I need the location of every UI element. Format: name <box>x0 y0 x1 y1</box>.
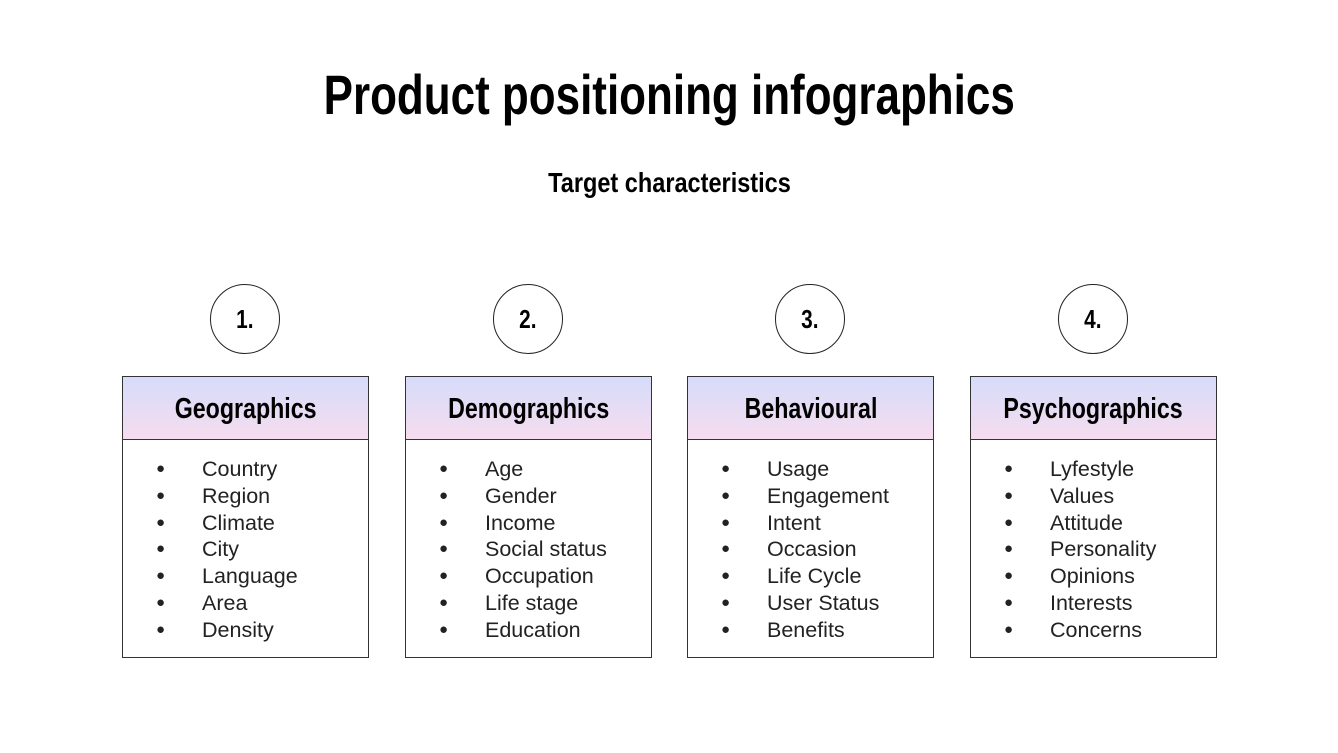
subtitle: Target characteristics <box>548 167 790 198</box>
panel: demographics: Gender <box>485 484 557 508</box>
circle 3: 3. <box>801 304 819 334</box>
panel: geographics: Geographics <box>175 393 316 425</box>
panel: demographics: Social status <box>485 537 607 561</box>
panel: demographics: Age <box>485 457 523 481</box>
panel: geographics: City <box>202 537 239 561</box>
panel: geographics: Density <box>202 618 274 642</box>
panel: behavioural: Intent <box>767 511 821 535</box>
panel: psychographics: Lyfestyle <box>1050 457 1134 481</box>
panel: demographics: Life stage <box>485 591 578 615</box>
panel: geographics: Climate <box>202 511 275 535</box>
panel: geographics: Country <box>202 457 277 481</box>
circle 3 <box>775 284 845 354</box>
circle 1 <box>210 284 280 354</box>
panel: behavioural: Behavioural <box>744 393 877 425</box>
panel: psychographics: Psychographics <box>1004 393 1183 425</box>
panel: behavioural: User Status <box>767 591 879 615</box>
panel: demographics: Demographics <box>448 393 609 425</box>
panel: behavioural: Benefits <box>767 618 845 642</box>
panel: geographics: Language <box>202 564 298 588</box>
circle 2: 2. <box>519 304 537 334</box>
panel: behavioural <box>687 376 934 658</box>
panel: geographics: Area <box>202 591 247 615</box>
panel: psychographics <box>970 376 1217 658</box>
panel: geographics: Region <box>202 484 270 508</box>
panel: psychographics: Attitude <box>1050 511 1123 535</box>
panel: psychographics: Personality <box>1050 537 1156 561</box>
panel: geographics <box>122 376 369 658</box>
circle 4 <box>1058 284 1128 354</box>
panel: behavioural: Engagement <box>767 484 889 508</box>
panel: psychographics: Values <box>1050 484 1114 508</box>
circle 2 <box>493 284 563 354</box>
circle 4: 4. <box>1084 304 1102 334</box>
panel: behavioural: Occasion <box>767 537 857 561</box>
panel: psychographics: Opinions <box>1050 564 1135 588</box>
panel: demographics: Income <box>485 511 556 535</box>
panel: behavioural: Usage <box>767 457 829 481</box>
panel: demographics: Education <box>485 618 581 642</box>
panel: demographics: Occupation <box>485 564 594 588</box>
panel: psychographics: Concerns <box>1050 618 1142 642</box>
panel: demographics <box>405 376 652 658</box>
circle 1: 1. <box>236 304 254 334</box>
panel: psychographics: Interests <box>1050 591 1132 615</box>
panel: behavioural: Life Cycle <box>767 564 861 588</box>
title: Product positioning infographics <box>323 63 1015 126</box>
